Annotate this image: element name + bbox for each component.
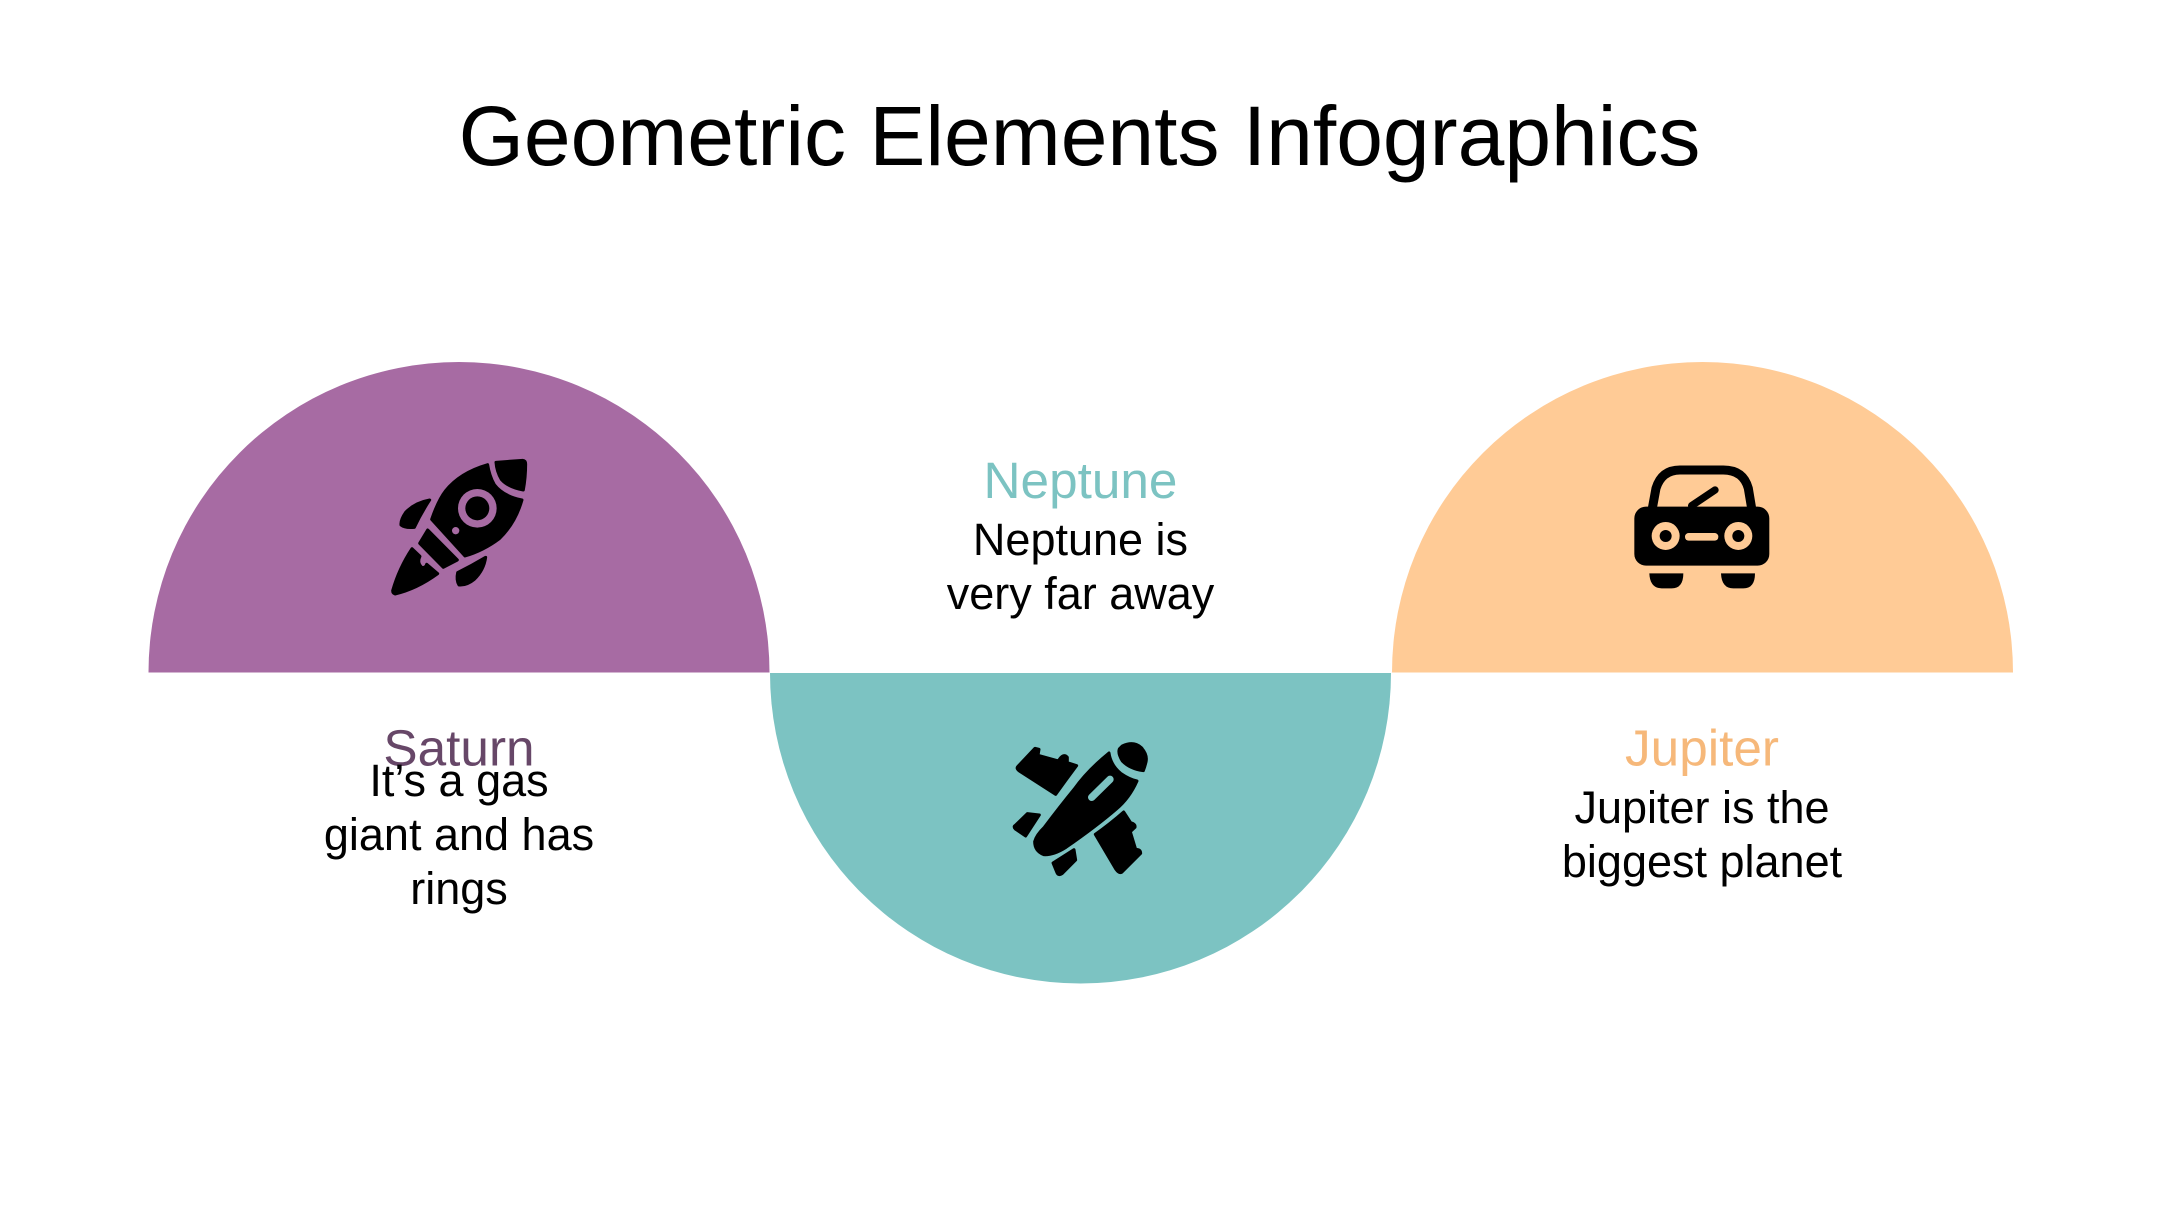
icon: airplane xyxy=(1014,744,1146,875)
panel: Jupiter xyxy=(1392,362,2013,887)
label: Saturn: Saturn xyxy=(383,720,535,776)
semicircle: purple xyxy=(148,362,770,672)
panel: Saturn xyxy=(148,362,770,914)
description: Saturn: It’s a gas xyxy=(369,755,549,806)
description: Jupiter: biggest planet xyxy=(1562,836,1843,887)
label: Jupiter: Jupiter xyxy=(1625,720,1779,776)
icon: car xyxy=(1634,470,1769,588)
description: Neptune: very far away xyxy=(947,568,1215,619)
panel: Neptune xyxy=(770,452,1391,984)
description: Neptune xyxy=(947,514,1215,619)
semicircle: teal xyxy=(770,673,1391,984)
description: Saturn xyxy=(324,755,594,914)
description: Neptune: Neptune is xyxy=(973,514,1188,565)
icon: rocket xyxy=(393,460,526,594)
description: Saturn: rings xyxy=(410,863,508,914)
description: Jupiter: Jupiter is the xyxy=(1574,782,1830,833)
title: Geometric Elements Infographics xyxy=(459,89,1700,183)
label: Neptune: Neptune xyxy=(984,452,1177,509)
semicircle: orange xyxy=(1392,362,2013,672)
description: Saturn: giant and has xyxy=(324,809,594,860)
description: Jupiter xyxy=(1562,782,1843,887)
